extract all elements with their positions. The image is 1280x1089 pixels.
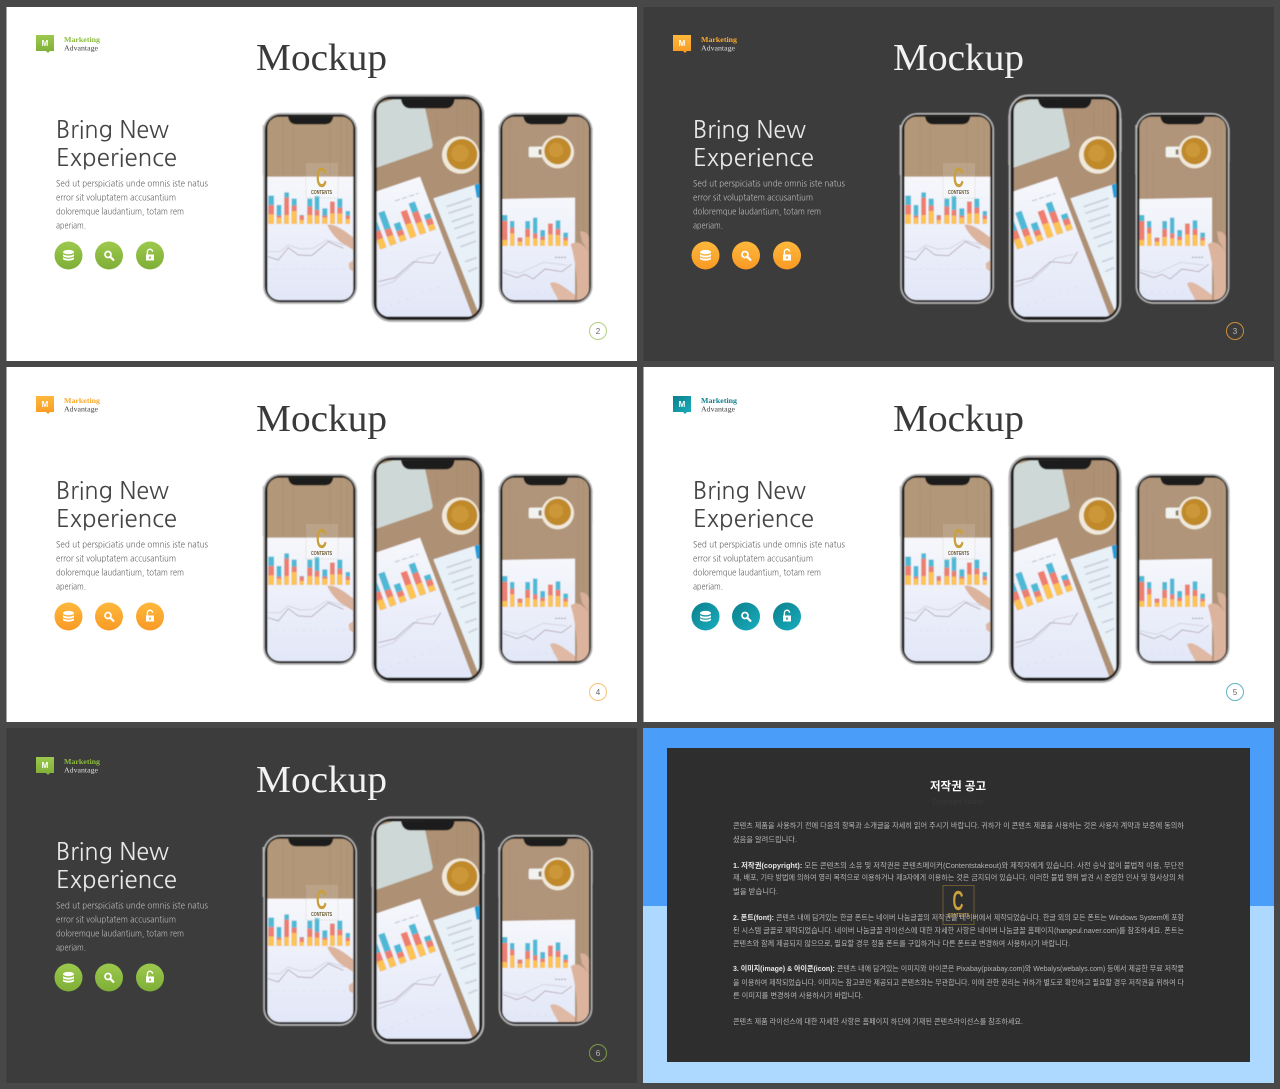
paragraph 3 image and icon: 른 이미지를 변경하여 사용하시기 바랍니다. — [733, 990, 863, 1000]
body text: doloremque laudantium, totam rem — [693, 568, 821, 578]
watermark: C — [316, 884, 327, 915]
heading — [56, 479, 177, 531]
page number: 5 — [1233, 688, 1238, 697]
page number — [1226, 322, 1244, 340]
logo: Advantage — [64, 44, 99, 52]
heading: Experience — [56, 507, 177, 531]
intro paragraph: 셨음을 알려드립니다. — [733, 834, 797, 844]
paragraph 1 copyright: 재, 배포, 기타 방법에 의하여 영리 목적으로 이용하거나 제3자에게 이용하는 것은 금지되어 있습니다. 이러한 불법 행위 발견 시 준엄한 민사 및 형사상의 처 — [733, 872, 1184, 882]
paragraph 3 image and icon: 3. 이미지(image) & 아이콘(icon): 콘텐츠 내에 담겨있는 이미지와 아이콘은 Pixabay(pixabay.com)와 Webalys(webalys.com) 등에서 제공한 무료 저작물 — [733, 963, 1184, 973]
phone mockups — [263, 817, 593, 1043]
slide background — [644, 7, 1274, 361]
body text: doloremque laudantium, totam rem — [56, 208, 184, 216]
watermark — [306, 162, 338, 198]
paragraph 3 image and icon — [733, 963, 1184, 1000]
body text: error sit voluptatem accusantium — [56, 554, 176, 564]
logo — [36, 396, 100, 414]
watermark — [943, 162, 975, 198]
icon buttons — [692, 602, 801, 630]
icon buttons — [692, 242, 801, 270]
dark panel — [667, 748, 1250, 1062]
logo: Advantage — [64, 766, 99, 774]
heading — [693, 118, 814, 170]
heading: Bring New — [56, 840, 169, 864]
heading: Bring New — [693, 479, 806, 503]
copyright subtitle: Copyright Notice — [932, 799, 984, 806]
body text: Sed ut perspiciatis unde omnis iste natus — [56, 902, 208, 910]
phone mockups — [900, 456, 1230, 682]
logo: Advantage — [64, 404, 99, 414]
paragraph 3 image and icon: 을 이용하여 제작되었습니다. 이미지는 참고로만 제공되고 콘텐츠와는 무관합니다. 이에 관한 권리는 귀하가 별도로 확인하고 필요할 경우 저작권을 위하여 다 — [733, 977, 1184, 987]
page number: 2 — [596, 327, 601, 336]
title: Mockup — [893, 398, 1024, 440]
heading: Experience — [56, 868, 177, 892]
watermark — [306, 884, 338, 920]
slide background — [6, 7, 637, 361]
icon buttons — [54, 242, 164, 270]
intro paragraph — [733, 820, 1184, 844]
slide 5: dark green — [6, 728, 637, 1083]
paragraph 2 font: 콘텐츠와 함께 제공되지 않으므로, 필요할 경우 정품 폰트를 구입하거나 다른 폰트로 변경하여 사용하시기 바랍니다. — [733, 938, 1070, 948]
blue background top — [643, 728, 1274, 906]
logo: Advantage — [701, 44, 736, 52]
body text — [56, 180, 208, 230]
watermark: C — [953, 162, 964, 193]
page number: 4 — [596, 688, 601, 697]
page number: 3 — [1233, 327, 1238, 336]
body text: error sit voluptatem accusantium — [693, 554, 813, 564]
body text: Sed ut perspiciatis unde omnis iste natus — [56, 180, 208, 188]
logo — [36, 757, 100, 775]
phone mockups — [900, 95, 1230, 321]
logo: Marketing — [64, 35, 100, 44]
page number: 6 — [596, 1049, 601, 1058]
paragraph 1 copyright: 1. 저작권(copyright): 모든 콘텐츠의 소유 및 저작권은 콘텐츠메이커(Contentstakeout)와 제작자에게 있습니다. 사전 승낙 없이 불법적 이용, 무단전 — [733, 860, 1184, 870]
heading: Bring New — [56, 479, 169, 503]
watermark: CONTENTS — [948, 551, 970, 557]
heading — [56, 118, 177, 170]
slide 2: dark orange — [644, 7, 1274, 361]
heading — [56, 840, 177, 892]
title: Mockup — [893, 37, 1024, 79]
page number — [1226, 684, 1244, 700]
body text — [56, 902, 208, 952]
logo: M — [42, 400, 49, 409]
body text: doloremque laudantium, totam rem — [693, 208, 821, 216]
copyright title: 저작권 공고 — [930, 779, 986, 793]
body text: error sit voluptatem accusantium — [56, 916, 176, 924]
heading — [693, 479, 814, 531]
page number — [590, 1044, 606, 1062]
slide 3: white orange — [6, 367, 637, 722]
body text — [693, 540, 845, 592]
body text: doloremque laudantium, totam rem — [56, 568, 184, 578]
paragraph 1 copyright — [733, 860, 1184, 896]
watermark — [306, 523, 338, 559]
logo: M — [42, 761, 49, 770]
body text: aperiam. — [56, 944, 86, 952]
paragraph 1 copyright: 벌을 받습니다. — [733, 886, 778, 896]
title: Mockup — [256, 759, 387, 801]
paragraph 2 font — [733, 912, 1184, 948]
body text — [56, 540, 208, 592]
slide 1: white green — [6, 7, 637, 361]
watermark — [943, 523, 975, 559]
watermark: CONTENTS — [311, 551, 333, 557]
title: Mockup — [256, 37, 387, 79]
body text: error sit voluptatem accusantium — [693, 194, 813, 202]
watermark: C — [316, 162, 327, 193]
slide background — [6, 728, 637, 1083]
icon buttons — [54, 602, 164, 630]
logo: Marketing — [64, 396, 100, 405]
title: Mockup — [256, 398, 387, 440]
body text: doloremque laudantium, totam rem — [56, 930, 184, 938]
watermark: C — [953, 523, 964, 554]
phone mockups — [263, 95, 593, 321]
icon buttons — [54, 964, 164, 992]
intro paragraph: 콘텐츠 제품을 사용하기 전에 다음의 항목과 소개글을 자세히 읽어 주시기 바랍니다. 귀하가 이 콘텐츠 제품을 사용하는 것은 사용자 계약과 보증에 동의하 — [733, 820, 1184, 830]
license note: 콘텐츠 제품 라이선스에 대한 자세한 사항은 홈페이지 하단에 기재된 콘텐츠라이선스를 참조하세요. — [733, 1016, 1023, 1026]
body text: Sed ut perspiciatis unde omnis iste natus — [56, 540, 208, 550]
logo: Advantage — [701, 404, 736, 414]
body text: Sed ut perspiciatis unde omnis iste natus — [693, 540, 845, 550]
light blue background bottom — [643, 906, 1274, 1083]
logo: Marketing — [64, 757, 100, 766]
slide 4: white teal — [644, 367, 1274, 722]
logo: M — [42, 39, 49, 48]
body text: aperiam. — [693, 582, 723, 592]
page number — [590, 684, 606, 700]
slide background — [644, 367, 1274, 722]
watermark: CONTENTS — [311, 912, 333, 918]
logo — [36, 35, 100, 53]
logo: Marketing — [701, 396, 737, 405]
body text: aperiam. — [693, 222, 723, 230]
heading: Bring New — [693, 118, 806, 142]
slide background — [6, 367, 637, 722]
body text: aperiam. — [56, 222, 86, 230]
body text: aperiam. — [56, 582, 86, 592]
logo — [673, 35, 737, 53]
body text: error sit voluptatem accusantium — [56, 194, 176, 202]
watermark logo: C — [952, 885, 964, 916]
logo — [673, 396, 737, 414]
watermark: C — [316, 523, 327, 554]
paragraph 2 font: 2. 폰트(font): 콘텐츠 내에 담겨있는 한글 폰트는 네이버 나눔글꼴의 저작권을 네이버에서 제작되었습니다. 한글 외의 모든 폰트는 Windows System에 포함 — [733, 912, 1184, 922]
slide 6: copyright notice — [643, 728, 1274, 1083]
logo: Marketing — [701, 35, 737, 44]
logo: M — [679, 400, 686, 409]
heading: Experience — [693, 146, 814, 170]
page number — [590, 322, 606, 340]
logo: M — [679, 39, 686, 48]
watermark: CONTENTS — [311, 190, 333, 196]
body text: Sed ut perspiciatis unde omnis iste natus — [693, 180, 845, 188]
heading: Experience — [693, 507, 814, 531]
watermark logo: CONTENTS — [948, 913, 970, 919]
watermark logo — [943, 885, 974, 924]
heading: Experience — [56, 146, 177, 170]
paragraph 2 font: 된 시스템 글꼴로 제작되었습니다. 네이버 나눔글꼴 라이선스에 대한 자세한 사항은 네이버 나눔글꼴 홈페이지(hangeul.naver.com)를 참조하세요. 폰트는 — [733, 925, 1184, 935]
watermark: CONTENTS — [948, 190, 970, 196]
heading: Bring New — [56, 118, 169, 142]
phone mockups — [263, 456, 593, 682]
body text — [693, 180, 845, 230]
